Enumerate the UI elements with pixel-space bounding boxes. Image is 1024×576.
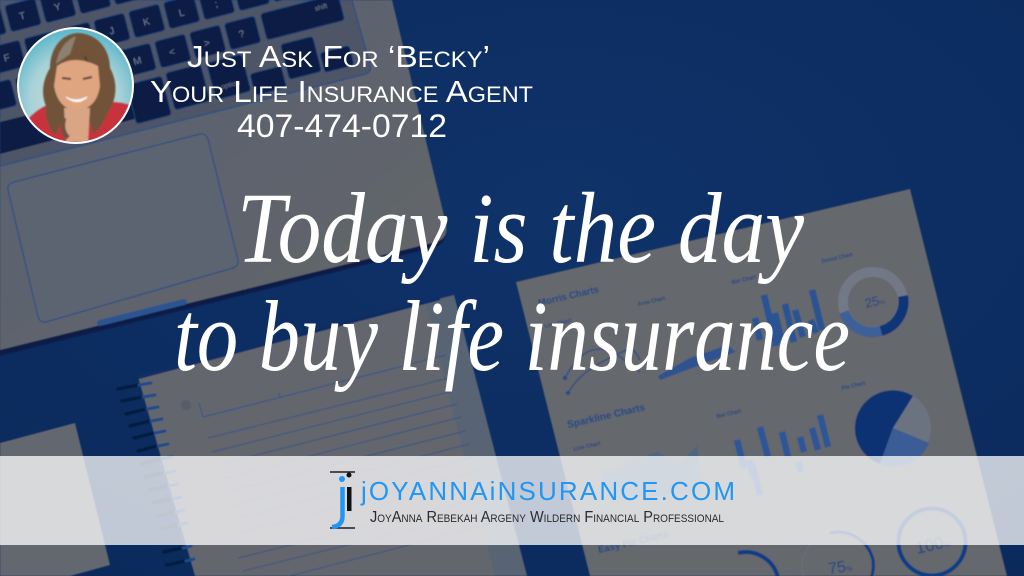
chart report page [516, 189, 1007, 576]
laptop keyboard: ? [238, 29, 246, 41]
laptop keyboard [0, 0, 354, 154]
easy pie gauges [738, 508, 966, 576]
small chart labels: Bar Chart [731, 274, 757, 286]
translucent footer band [0, 456, 1024, 545]
paper sheet lower left [0, 423, 110, 576]
line chart [564, 349, 640, 394]
laptop keyboard: J [108, 26, 116, 38]
donut value: 25% [863, 292, 887, 311]
phone number: 407-474-0712 [237, 108, 447, 144]
title [174, 172, 850, 392]
header: agent contact [150, 39, 533, 144]
laptop keyboard: T [18, 11, 27, 23]
laptop notch [100, 302, 184, 323]
label: morris charts: Morris Charts [537, 284, 600, 309]
bar chart one [755, 290, 822, 346]
title line one: Today is the day [237, 172, 804, 284]
bar chart two [737, 415, 828, 495]
laptop keyboard: K [142, 16, 152, 29]
area chart [658, 345, 735, 380]
donut chart [843, 272, 904, 332]
small chart labels: Bar Chart [716, 408, 742, 420]
small chart labels: Line Chart [573, 441, 601, 453]
notebook [118, 295, 527, 576]
notebook spiral binding [118, 383, 194, 565]
laptop trackpad [8, 134, 238, 322]
laptop keyboard: Y [53, 1, 63, 14]
laptop keyboard: < [168, 47, 177, 59]
small chart labels: Area Chart [637, 296, 666, 308]
pie chart [855, 390, 931, 467]
website address: jOYANNAiNSURANCE.COM [360, 476, 735, 506]
label: easy pie charts: Easy Pie Charts [597, 529, 670, 556]
sparkline area chart [602, 446, 702, 502]
small chart labels: Donut Chart [821, 252, 854, 265]
agent role line: Your Life Insurance Agent [150, 74, 533, 109]
laptop [0, 0, 447, 356]
gauge value one hundred: 100% [914, 532, 952, 558]
tagline: JoyAnna Rebekah Argeny Wildern Financial Professional [370, 509, 724, 526]
agent name line: Just Ask For ‘Becky’ [187, 39, 490, 74]
small chart labels: Line Chart [544, 318, 572, 330]
laptop keyboard: option [220, 80, 241, 91]
label: sparkline charts: Sparkline Charts [566, 402, 647, 431]
laptop keyboard: M [132, 55, 143, 68]
portrait of Becky [15, 25, 136, 150]
laptop keyboard: F [3, 53, 11, 65]
small chart labels: Pie Chart [841, 381, 866, 392]
laptop keyboard: > [203, 38, 211, 50]
laptop keyboard: L [178, 7, 186, 20]
title line two: to buy life insurance [174, 280, 850, 392]
laptop keyboard: shift [314, 3, 328, 13]
logo mark: ji [330, 472, 355, 528]
small chart labels [544, 252, 866, 453]
